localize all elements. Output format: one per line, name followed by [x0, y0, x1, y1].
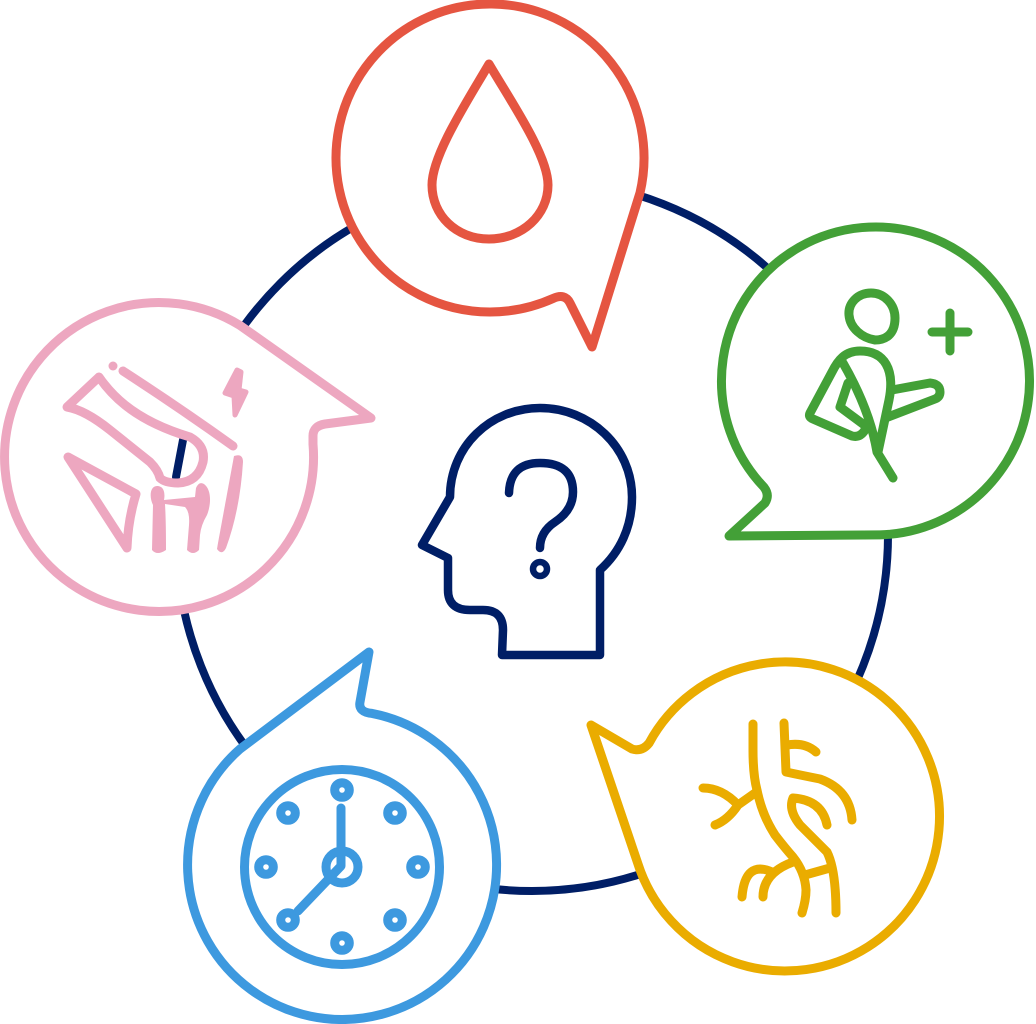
- bubble: painful knee joint: [5, 302, 371, 611]
- central head with question mark: [422, 408, 632, 655]
- ring connecting bubbles: [176, 179, 888, 891]
- bubble: blood drop: [336, 4, 644, 347]
- bubble: person with back pain: [721, 227, 1029, 536]
- bubble: clock: [188, 652, 497, 1019]
- bubble: blood vessels: [591, 662, 940, 971]
